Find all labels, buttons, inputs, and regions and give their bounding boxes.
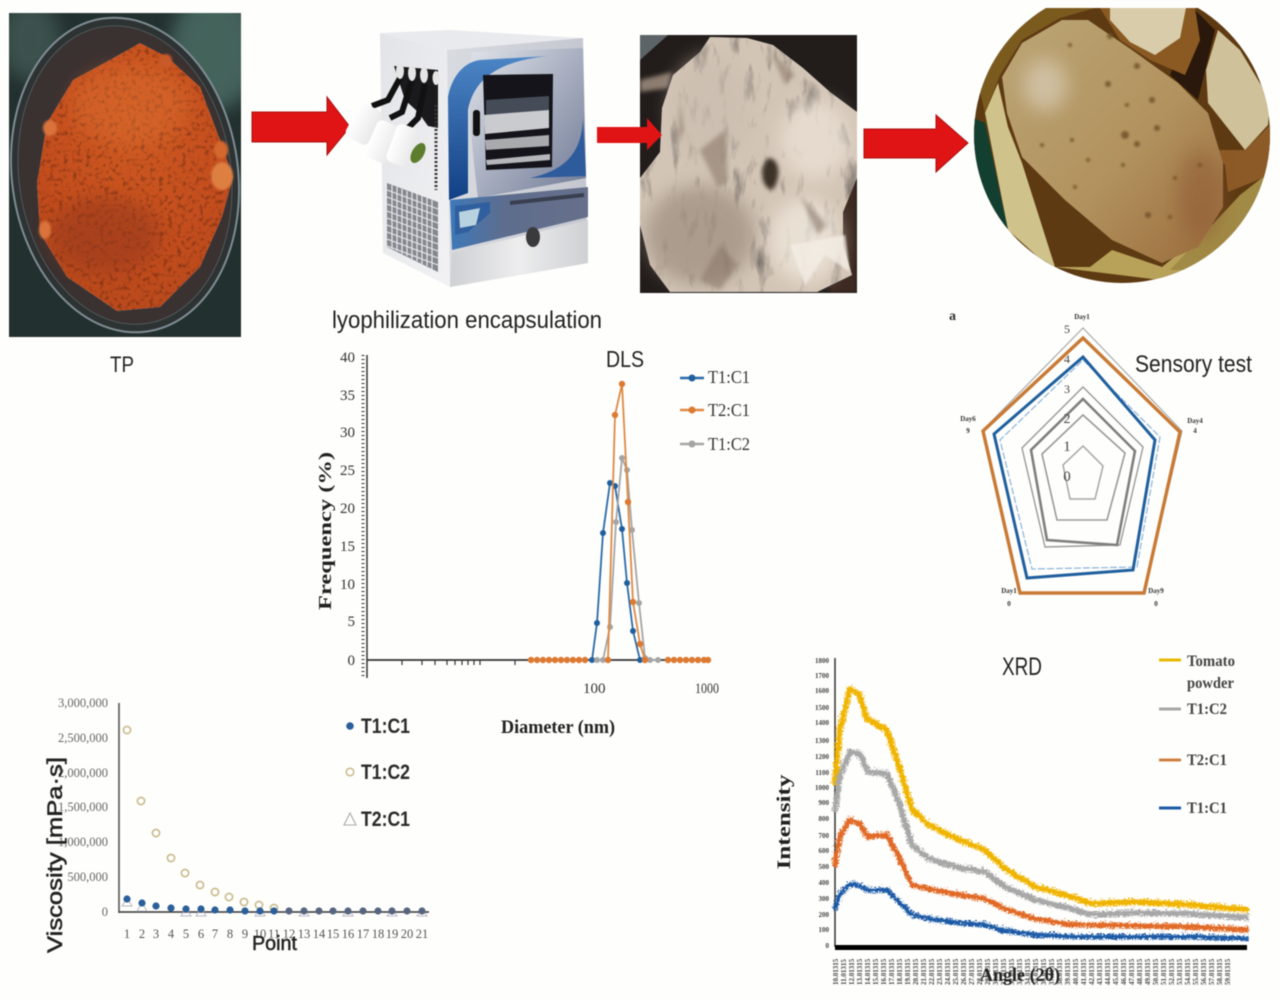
- x axis rotated tick labels: 18.01315: [896, 958, 904, 985]
- x axis rotated tick labels: 47.01315: [1128, 958, 1136, 985]
- x axis rotated tick labels: 40.01315: [1072, 958, 1080, 985]
- x axis labels: 12: [283, 927, 295, 941]
- heading: Sensory test: Sensory test: [1135, 351, 1252, 378]
- radar scale labels: 0: [1063, 469, 1071, 485]
- x axis rotated tick labels: 37.01315: [1048, 958, 1056, 985]
- radar axis labels: Day4: [1187, 417, 1203, 425]
- x axis labels: 2: [139, 927, 145, 941]
- x axis rotated tick labels: 28.01315: [976, 958, 984, 985]
- y axis ticks and labels: 10: [340, 577, 355, 593]
- x axis labels: 7: [212, 927, 218, 941]
- axis title: Frequency: Frequency (%): [315, 452, 336, 610]
- radar scale labels: 2: [1064, 412, 1070, 427]
- x axis labels: 11: [268, 927, 280, 941]
- x axis rotated tick labels: 35.01315: [1032, 958, 1040, 985]
- y axis ticks and labels: 25: [340, 463, 355, 479]
- x axis rotated tick labels: 11.01315: [840, 959, 848, 985]
- x axis labels: 16: [342, 927, 354, 941]
- x axis rotated tick labels: 44.01315: [1104, 958, 1112, 985]
- chart: XRD diffractogram: [774, 653, 1247, 986]
- x axis labels: 9: [242, 927, 248, 941]
- chart: viscosity scatter: [44, 696, 429, 955]
- chart: sensory test radar: [949, 309, 1252, 608]
- x axis rotated tick labels: 46.01315: [1120, 958, 1128, 985]
- y axis labels: 300: [818, 895, 830, 903]
- y axis labels: 400: [818, 879, 830, 887]
- legend: viscosity: T1:C1: [361, 715, 410, 738]
- radar grid and series: [982, 328, 1182, 593]
- legend: viscosity: T2:C1: [361, 808, 410, 831]
- x axis rotated tick labels: 32.01315: [1008, 958, 1016, 985]
- x axis rotated tick labels: 17.01315: [888, 958, 896, 985]
- y axis labels: 1400: [815, 719, 830, 727]
- x axis rotated tick labels: 26.01315: [960, 958, 968, 985]
- heading: DLS: DLS: [606, 346, 644, 372]
- series: T2:C1: [833, 818, 1247, 928]
- y axis labels: [58, 696, 119, 919]
- x axis rotated tick labels: 59.01315: [1224, 958, 1232, 985]
- y axis labels: 900: [818, 799, 830, 807]
- series: T1:C2: [594, 455, 661, 663]
- x axis labels: 14: [313, 927, 326, 941]
- x axis rotated tick labels: 51.01315: [1160, 958, 1168, 985]
- x axis rotated tick labels: 41.01315: [1080, 958, 1088, 985]
- y axis labels: 1000: [815, 784, 830, 792]
- series: T1:C1: [589, 480, 643, 663]
- y axis labels: 100: [818, 926, 830, 934]
- arrow: flakes to fortified bread: [864, 115, 968, 172]
- legend: viscosity: T1:C2: [361, 761, 410, 784]
- y axis labels: 1100: [815, 769, 829, 777]
- series: T1:C2: [123, 726, 278, 912]
- legend: XRD: powder: [1187, 675, 1234, 692]
- photo: lyophilized encapsulated flakes: [640, 35, 857, 293]
- x axis ticks and labels: 100: [583, 681, 606, 697]
- label: TP: TP: [110, 352, 134, 377]
- y axis labels: 1600: [815, 687, 830, 695]
- x axis rotated tick labels: 33.01315: [1016, 958, 1024, 985]
- x axis rotated tick labels: 19.01315: [904, 958, 912, 985]
- x axis rotated tick labels: 16.01315: [880, 958, 888, 985]
- x axis rotated tick labels: 23.01315: [936, 958, 944, 985]
- x axis rotated tick labels: 45.01315: [1112, 958, 1120, 985]
- panel letter: a: [949, 309, 956, 324]
- x axis labels: 15: [327, 927, 339, 941]
- y axis labels: 600: [818, 847, 830, 855]
- series: T1:C1: [833, 882, 1247, 937]
- y axis ticks and labels: 5: [348, 614, 355, 630]
- axis title: Diameter: Diameter (nm): [501, 717, 615, 738]
- radar axis labels: 0: [1007, 600, 1011, 608]
- x axis rotated tick labels: 21.01315: [920, 958, 928, 985]
- x axis ticks and labels: [367, 660, 719, 697]
- x axis labels: 19: [386, 927, 398, 941]
- x axis rotated tick labels: 58.01315: [1216, 958, 1224, 985]
- y axis labels: 2,000,000: [58, 766, 108, 780]
- y axis ticks and labels: 15: [340, 539, 355, 555]
- arrow: powder to freeze dryer: [252, 97, 350, 155]
- x axis labels: 6: [198, 927, 204, 941]
- radar scale labels: 1: [1063, 439, 1071, 455]
- x axis rotated tick labels: 12.01315: [848, 958, 856, 985]
- y axis ticks and labels: 40: [340, 350, 355, 366]
- legend: DLS: T1:C1: [708, 367, 750, 387]
- radar axis labels: 0: [1154, 600, 1158, 608]
- x axis labels: 3: [153, 927, 159, 941]
- x axis labels: 10: [254, 927, 266, 941]
- legend: XRD: T1:C1: [1187, 800, 1227, 817]
- x axis labels: 13: [298, 927, 310, 941]
- x axis labels: 5: [183, 927, 189, 941]
- photo: tomato powder in petri dish: [8, 12, 242, 338]
- y axis labels: 1,000,000: [58, 835, 108, 849]
- x axis rotated tick labels: 55.01315: [1192, 958, 1200, 985]
- radar scale labels: [1063, 322, 1071, 485]
- x axis rotated tick labels: 39.01315: [1064, 958, 1072, 985]
- legend: XRD: [1159, 653, 1235, 817]
- legend: viscosity: [344, 715, 410, 831]
- legend: DLS: [680, 367, 750, 454]
- radar axis labels: [960, 313, 1203, 608]
- axis title: Intensity: Intensity: [774, 774, 795, 870]
- y axis labels: 1300: [815, 737, 830, 745]
- y axis labels: 1200: [815, 753, 830, 761]
- x axis rotated tick labels: 30.01315: [992, 958, 1000, 985]
- axis title: Viscosity: Viscosity [mPa·s]: [44, 757, 67, 953]
- radar axis labels: Day9: [1148, 587, 1164, 595]
- heading: XRD: XRD: [1002, 653, 1042, 681]
- axis title: Point: Point: [252, 933, 297, 955]
- x axis rotated tick labels: 13.01315: [856, 958, 864, 985]
- image: freeze dryer: [344, 30, 588, 287]
- drying flasks and manifold: [344, 63, 440, 190]
- x axis rotated tick labels: [832, 958, 1232, 985]
- x axis labels: [119, 912, 429, 941]
- radar scale labels: 3: [1064, 382, 1070, 396]
- y axis ticks and labels: [340, 350, 367, 678]
- y axis labels: 0: [102, 905, 108, 919]
- x axis labels: 21: [416, 927, 428, 941]
- y axis ticks and labels: 35: [340, 388, 355, 404]
- radar scale labels: 5: [1064, 322, 1070, 336]
- y axis labels: 200: [818, 911, 830, 919]
- x axis rotated tick labels: 24.01315: [944, 958, 952, 985]
- x axis rotated tick labels: 38.01315: [1056, 958, 1064, 985]
- series: T1:C2: [833, 750, 1247, 916]
- x axis rotated tick labels: 36.01315: [1040, 958, 1048, 985]
- legend: DLS: T1:C2: [708, 434, 750, 454]
- x axis band: [835, 945, 1247, 950]
- legend: DLS: T2:C1: [708, 400, 750, 420]
- legend: XRD: T1:C2: [1187, 701, 1227, 718]
- legend: XRD: Tomato: [1187, 653, 1235, 670]
- x axis rotated tick labels: 42.01315: [1088, 958, 1096, 985]
- series: T1:C1: [123, 895, 426, 915]
- y axis labels: 1800: [815, 657, 830, 665]
- radar axis labels: 9: [966, 427, 970, 435]
- x axis rotated tick labels: 22.01315: [928, 958, 936, 985]
- y axis labels: 500,000: [67, 870, 108, 884]
- y axis labels: 1700: [815, 672, 830, 680]
- x axis rotated tick labels: 49.01315: [1144, 958, 1152, 985]
- x axis rotated tick labels: 20.01315: [912, 958, 920, 985]
- radar axis labels: 4: [1193, 427, 1197, 435]
- y axis labels: 1500: [815, 704, 830, 712]
- y axis ticks and labels: 30: [340, 425, 355, 441]
- series: tomato powder: [833, 687, 1247, 908]
- radar axis labels: Day1: [1074, 313, 1090, 321]
- y axis labels: [815, 657, 835, 950]
- x axis labels: 17: [357, 927, 369, 941]
- radar axis labels: Day1: [1001, 587, 1017, 595]
- x axis rotated tick labels: 54.01315: [1184, 958, 1192, 985]
- x axis ticks and labels: 1000: [695, 681, 719, 697]
- y axis ticks and labels: 20: [340, 501, 355, 517]
- x axis rotated tick labels: 31.01315: [1000, 958, 1008, 985]
- vent grille: [387, 183, 438, 272]
- x axis labels: 20: [401, 927, 413, 941]
- x axis rotated tick labels: 14.01315: [864, 958, 872, 985]
- x axis rotated tick labels: 34.01315: [1024, 958, 1032, 985]
- photo: fortified bread in circle: [970, 0, 1275, 290]
- y axis labels: 1,500,000: [58, 800, 108, 814]
- y axis labels: 800: [818, 815, 830, 823]
- series: T2:C1: [528, 381, 711, 663]
- x axis rotated tick labels: 43.01315: [1096, 958, 1104, 985]
- x axis rotated tick labels: 10.01315: [832, 958, 840, 985]
- x axis rotated tick labels: 52.01315: [1168, 958, 1176, 985]
- y axis labels: 2,500,000: [58, 731, 108, 745]
- x axis rotated tick labels: 50.01315: [1152, 958, 1160, 985]
- x axis rotated tick labels: 29.01315: [984, 958, 992, 985]
- axis title: Angle: Angle (2θ): [980, 965, 1060, 986]
- x axis labels: 18: [372, 927, 384, 941]
- x axis labels: 8: [227, 927, 233, 941]
- radar axis labels: Day6: [960, 415, 976, 423]
- y axis labels: 0: [826, 942, 830, 950]
- x axis labels: 1: [124, 927, 130, 941]
- x axis rotated tick labels: 25.01315: [952, 958, 960, 985]
- x axis rotated tick labels: 56.01315: [1200, 958, 1208, 985]
- series: T2:C1: [122, 898, 427, 916]
- x axis rotated tick labels: 27.01315: [968, 958, 976, 985]
- x axis labels: 4: [168, 927, 175, 941]
- radar scale labels: 4: [1064, 352, 1070, 366]
- x axis rotated tick labels: 57.01315: [1208, 958, 1216, 985]
- arrow: freeze dryer to encapsulated powder: [597, 118, 662, 150]
- y axis labels: 500: [818, 863, 830, 871]
- x axis rotated tick labels: 53.01315: [1176, 958, 1184, 985]
- x axis rotated tick labels: 48.01315: [1136, 958, 1144, 985]
- legend: XRD: T2:C1: [1187, 752, 1227, 769]
- y axis labels: 3,000,000: [58, 696, 108, 710]
- chart: DLS particle size distribution: [315, 346, 750, 738]
- y axis ticks and labels: 0: [348, 653, 355, 669]
- label: lyophilization encapsulation: lyophilization encapsulation: [332, 307, 602, 334]
- x axis rotated tick labels: 15.01315: [872, 958, 880, 985]
- y axis labels: 700: [818, 832, 830, 840]
